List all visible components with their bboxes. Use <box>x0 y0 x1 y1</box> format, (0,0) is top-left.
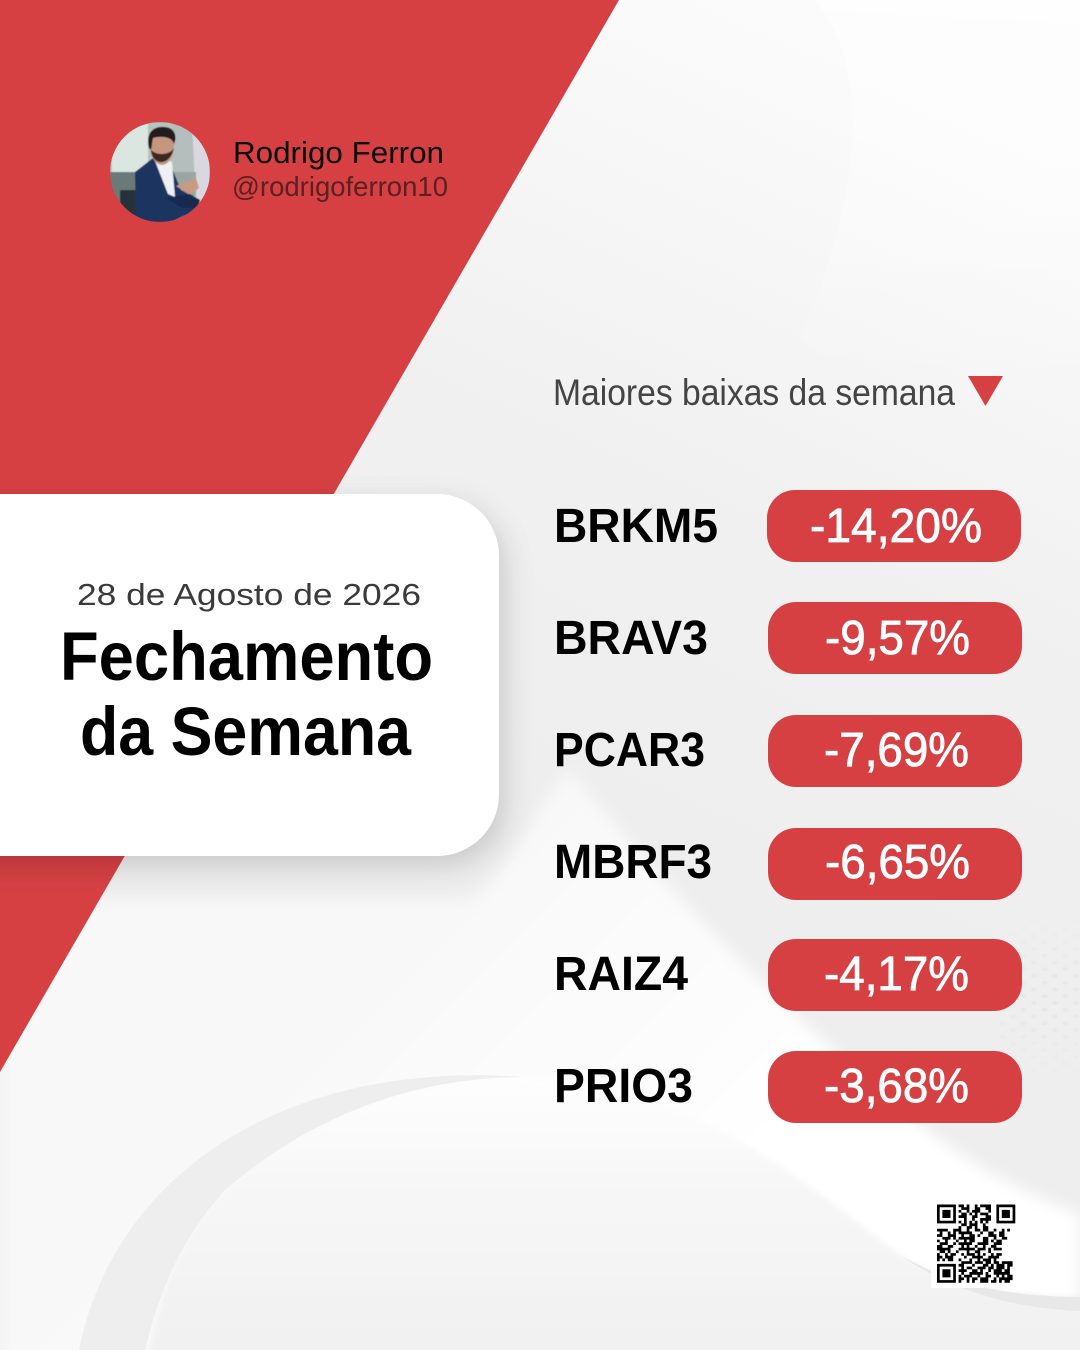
row: BRKM5 <box>554 490 1021 562</box>
background <box>460 0 1080 1294</box>
date: 28 de Agosto de 2026 <box>77 577 421 612</box>
icon: avatar portrait <box>110 122 210 222</box>
title <box>60 618 433 770</box>
red diagonal panel <box>0 0 619 1072</box>
row: MBRF3 <box>554 828 1022 900</box>
row: PRIO3: -3,68% <box>824 1060 969 1113</box>
row: BRAV3 <box>554 602 1022 674</box>
row: PRIO3 <box>554 1051 1022 1123</box>
row: PCAR3: PCAR3 <box>554 724 705 777</box>
row: RAIZ4 <box>554 939 1022 1011</box>
right crescent swoosh <box>900 1255 1080 1311</box>
icon: down triangle <box>968 376 1003 406</box>
row: RAIZ4: -4,17% <box>824 948 969 1001</box>
row: BRKM5: -14,20% <box>810 500 982 553</box>
title: Fechamento <box>60 618 433 695</box>
profile <box>110 122 448 222</box>
row: RAIZ4: RAIZ4 <box>554 948 688 1001</box>
row: BRKM5: BRKM5 <box>554 500 718 553</box>
row: BRAV3: -9,57% <box>825 612 970 665</box>
row: PCAR3: -7,69% <box>824 724 969 777</box>
row: MBRF3: MBRF3 <box>554 836 712 889</box>
row: PRIO3: PRIO3 <box>554 1060 693 1113</box>
name: Rodrigo Ferron <box>233 135 444 170</box>
title: da Semana <box>80 693 412 770</box>
icon: QR code <box>931 1198 1021 1288</box>
date card <box>0 494 499 856</box>
bottom crescent swoosh <box>79 1075 522 1350</box>
handle: @rodrigoferron10 <box>232 171 448 202</box>
row: MBRF3: -6,65% <box>825 836 970 889</box>
row: PCAR3 <box>554 715 1022 787</box>
row: BRAV3: BRAV3 <box>554 612 708 665</box>
heading: biggest weekly losses: Maiores baixas da semana <box>553 372 955 413</box>
card background <box>0 494 499 856</box>
